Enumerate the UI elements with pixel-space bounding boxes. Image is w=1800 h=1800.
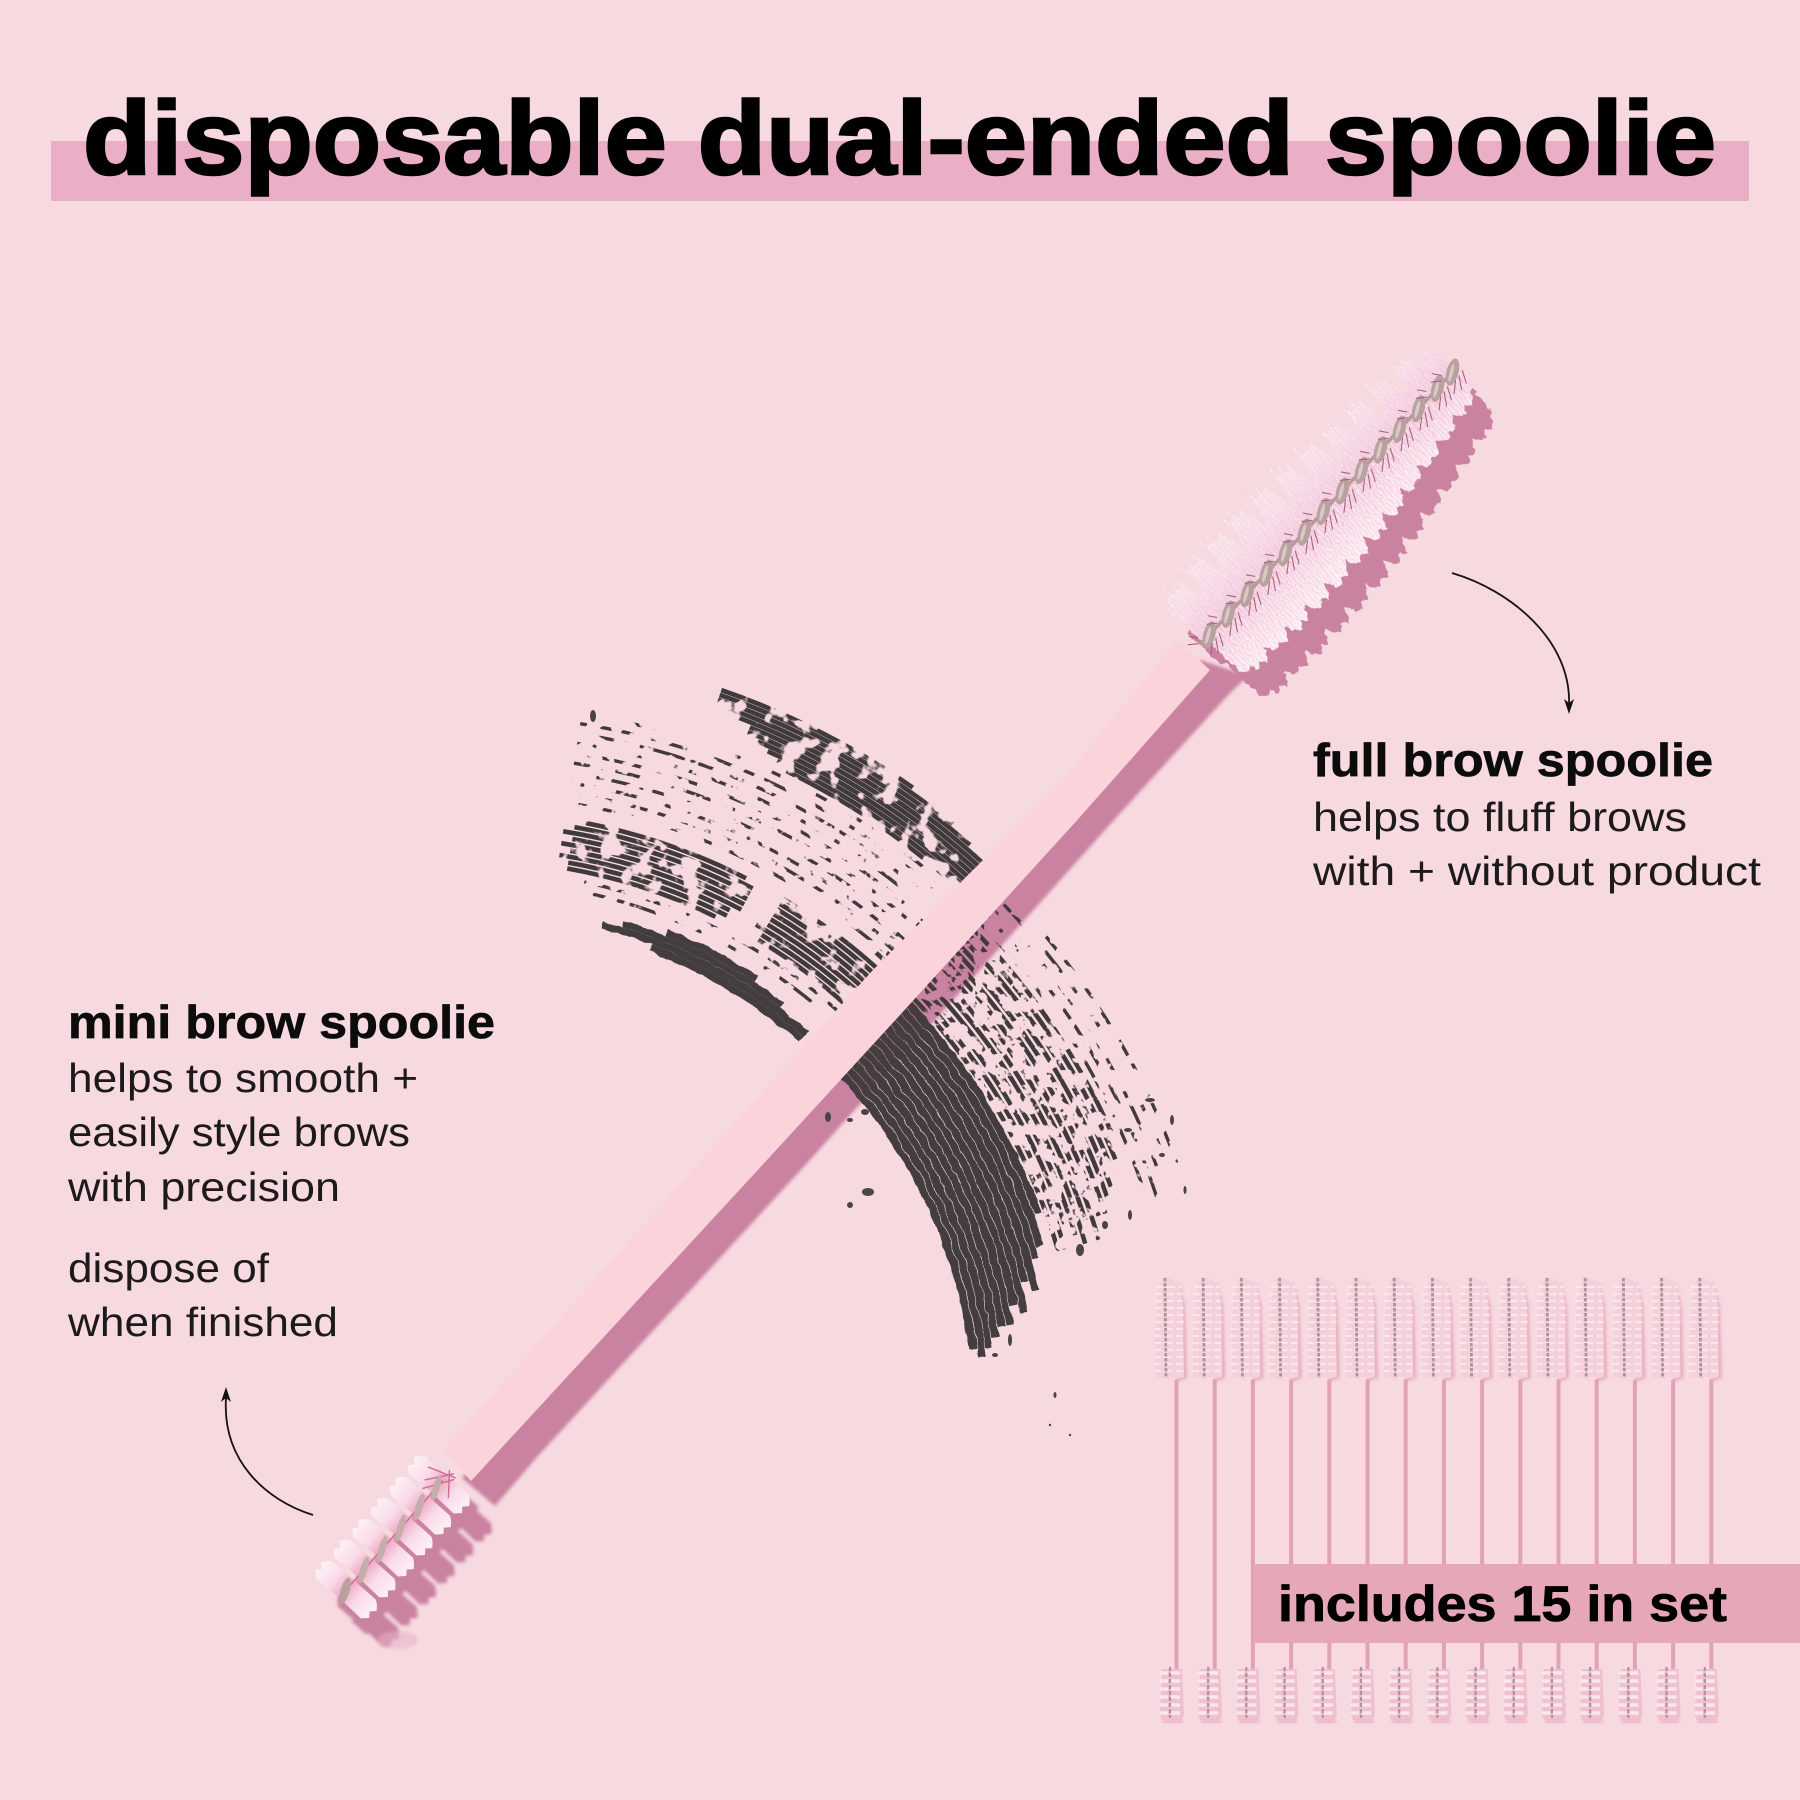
mini bristles — [311, 1451, 475, 1623]
label band — [1254, 1564, 1800, 1643]
disposal note: dispose of — [68, 1245, 270, 1291]
set of 15 spoolies — [1154, 1277, 1722, 1723]
mini brow bristles shadow — [331, 1476, 499, 1653]
arrow: to full brow text — [1452, 573, 1574, 714]
heading: full brow spoolie — [1313, 734, 1713, 786]
full brow spoolie head — [1141, 312, 1510, 694]
main handle shadow — [462, 660, 1248, 1506]
smear: beaded right strands — [470, 717, 1173, 1420]
twisted wire core — [1184, 351, 1477, 664]
description: with precision — [67, 1164, 340, 1210]
mini twisted core — [320, 1458, 463, 1613]
includes label — [1254, 1564, 1800, 1643]
title text: disposable dual-ended spoolie — [83, 81, 1716, 197]
description: easily style brows — [68, 1109, 410, 1155]
smear: sparse speckle and bristle marks — [470, 668, 1222, 1420]
disposal note — [67, 1245, 338, 1345]
main spoolie — [308, 312, 1524, 1653]
title with highlight band — [51, 81, 1749, 201]
smear: outlying specks — [590, 710, 1186, 1436]
smear: hatched upper bands — [470, 648, 1242, 1420]
description: with + without product — [1312, 848, 1762, 894]
smear: lower-left dark streak — [470, 894, 996, 1420]
callout: mini brow spoolie — [67, 996, 495, 1515]
highlight band — [51, 141, 1749, 201]
mascara smear — [470, 648, 1242, 1436]
arrow: to mini brow text — [221, 1387, 313, 1515]
disposal note: when finished — [67, 1299, 338, 1345]
label text: includes 15 in set — [1278, 1576, 1727, 1632]
description: helps to smooth + — [68, 1055, 418, 1101]
mini brow spoolie head — [308, 1447, 479, 1626]
full brow bristles shadow — [1176, 349, 1524, 710]
upper bristles — [1150, 319, 1457, 642]
heading: mini brow spoolie — [68, 996, 495, 1048]
faint smudge under mini brush — [378, 1631, 418, 1649]
description — [67, 1055, 418, 1210]
lower bristles — [1205, 369, 1502, 683]
callout: full brow spoolie — [1312, 573, 1762, 894]
description: helps to fluff brows — [1313, 794, 1687, 840]
smear: dense lower band — [470, 816, 1074, 1420]
handle — [443, 640, 1210, 1481]
description — [1312, 794, 1762, 894]
